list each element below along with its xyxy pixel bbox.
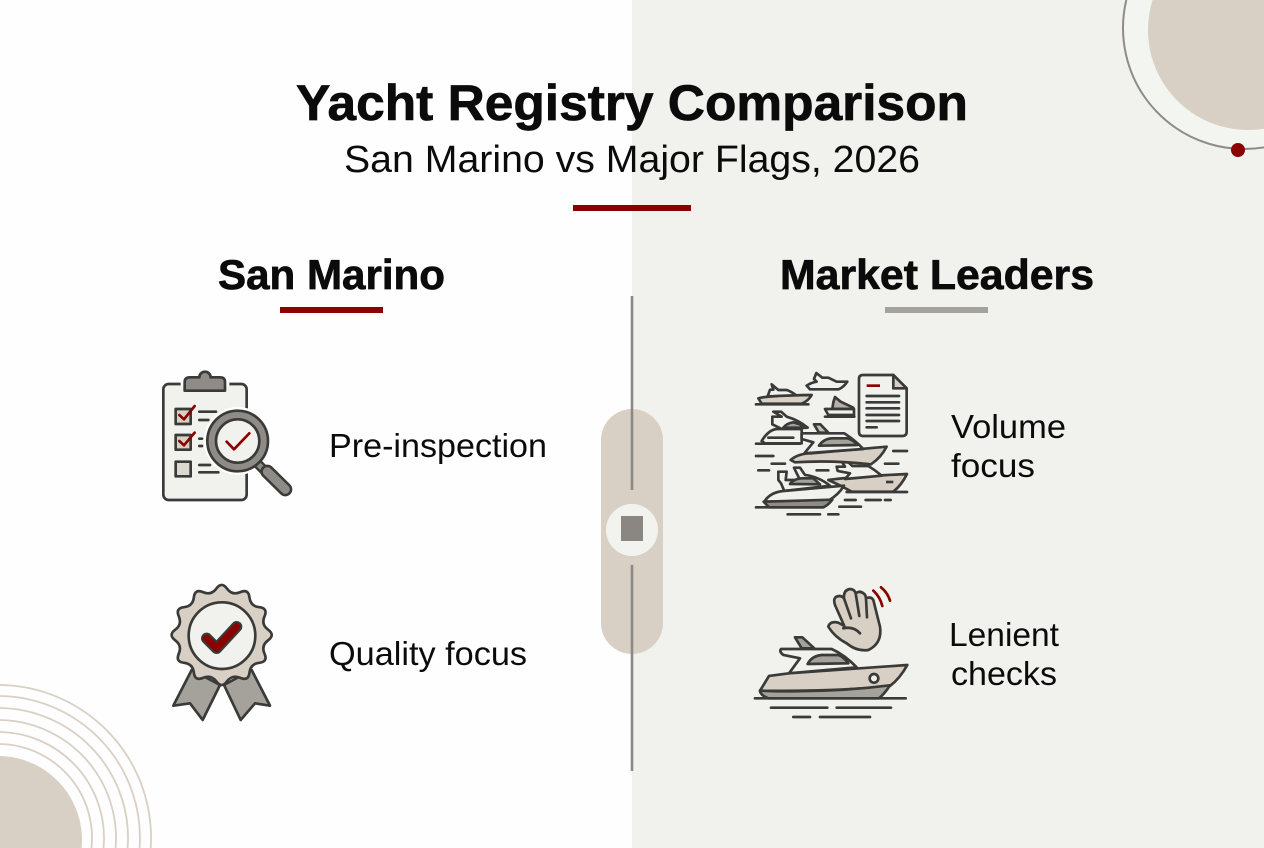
wave marks (873, 587, 890, 606)
water lines (756, 451, 907, 514)
cabin (780, 649, 857, 673)
big yacht (791, 424, 887, 464)
small yacht 2 (807, 373, 847, 389)
small yacht 3 (825, 397, 854, 417)
panel: right background (632, 0, 1264, 848)
text: Volume focus: Volume (951, 408, 1066, 445)
back right yacht (828, 459, 907, 492)
small yacht 1 (756, 384, 812, 404)
water lines (755, 698, 906, 717)
title accent bar (573, 205, 691, 211)
center divider (601, 296, 663, 771)
hand (828, 589, 880, 650)
front yacht (756, 468, 844, 507)
decoration: bottom left concentric rings (0, 685, 151, 848)
fin (795, 637, 814, 648)
heading accent: Market Leaders (885, 307, 988, 313)
text: Lenient checks (949, 616, 1059, 692)
subtitle: San Marino vs Major Flags, 2026 (344, 139, 920, 181)
title: Yacht Registry Comparison (296, 75, 968, 131)
icon: fleet of yachts with document (756, 373, 907, 514)
icon: waving hand over yacht (755, 587, 907, 717)
heading: Market Leaders: Market Leaders (780, 251, 1094, 298)
text: Quality focus: Quality focus (329, 635, 527, 672)
panel: left background (0, 0, 632, 848)
medium yacht (756, 412, 808, 444)
hull (760, 665, 907, 691)
text: Lenient checks: checks (951, 655, 1057, 692)
document (859, 375, 907, 436)
heading: San Marino: San Marino (218, 251, 445, 298)
icon: clipboard with magnifier (163, 372, 285, 500)
text: Lenient checks: Lenient (949, 616, 1059, 653)
decoration: top right circle (1123, 0, 1264, 157)
icon: quality rosette badge (172, 585, 272, 720)
text: Pre-inspection: Pre-inspection (329, 427, 547, 464)
text: Volume focus: focus (951, 447, 1035, 484)
heading accent: San Marino (280, 307, 383, 313)
text: Volume focus (951, 408, 1066, 484)
